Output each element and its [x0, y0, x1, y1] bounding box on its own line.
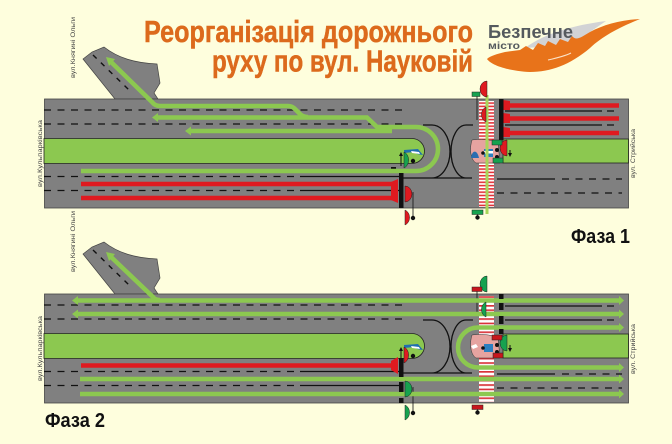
title: Реорганізація дорожнього	[144, 14, 473, 49]
title	[144, 14, 473, 78]
traffic signals	[404, 81, 507, 225]
pedestrian island	[471, 334, 500, 358]
street labels: вул.Кульпарківська	[36, 316, 44, 381]
panel: phase 1 intersection	[44, 47, 628, 225]
red arrowhead	[391, 357, 398, 374]
pedestrian island	[471, 139, 500, 163]
logo: Безпечне місто: Безпечне	[488, 21, 573, 42]
street labels: вул. Стрийська	[629, 129, 637, 178]
title: руху по вул. Науковій	[212, 44, 473, 78]
stop lines	[399, 99, 504, 208]
street labels: вул.Княгині Ольги	[69, 17, 77, 78]
red route	[81, 363, 393, 368]
pedestrian crossing	[479, 296, 494, 402]
street labels: вул.Княгині Ольги	[69, 211, 77, 272]
green arrowheads	[72, 252, 624, 398]
street labels	[36, 17, 637, 381]
street labels: вул.Кульпарківська	[36, 120, 44, 187]
stop lines	[399, 294, 504, 403]
pedestrian crossing	[479, 101, 494, 207]
red arrowheads	[391, 100, 510, 203]
traffic signals	[404, 276, 507, 420]
label: phase 1: Фаза 1	[571, 226, 630, 248]
island icons	[471, 343, 499, 354]
street labels: вул. Стрийська	[629, 324, 637, 374]
red routes	[81, 106, 619, 198]
island icons	[471, 148, 499, 159]
label: phase 2: Фаза 2	[45, 410, 105, 432]
green routes	[78, 255, 619, 394]
green routes	[81, 60, 438, 171]
green arrowheads	[106, 57, 191, 136]
logo: Безпечне місто	[487, 19, 640, 72]
pedestrian route	[486, 95, 488, 214]
panel: phase 2 intersection	[44, 242, 628, 420]
logo: Безпечне місто: місто	[488, 40, 520, 52]
